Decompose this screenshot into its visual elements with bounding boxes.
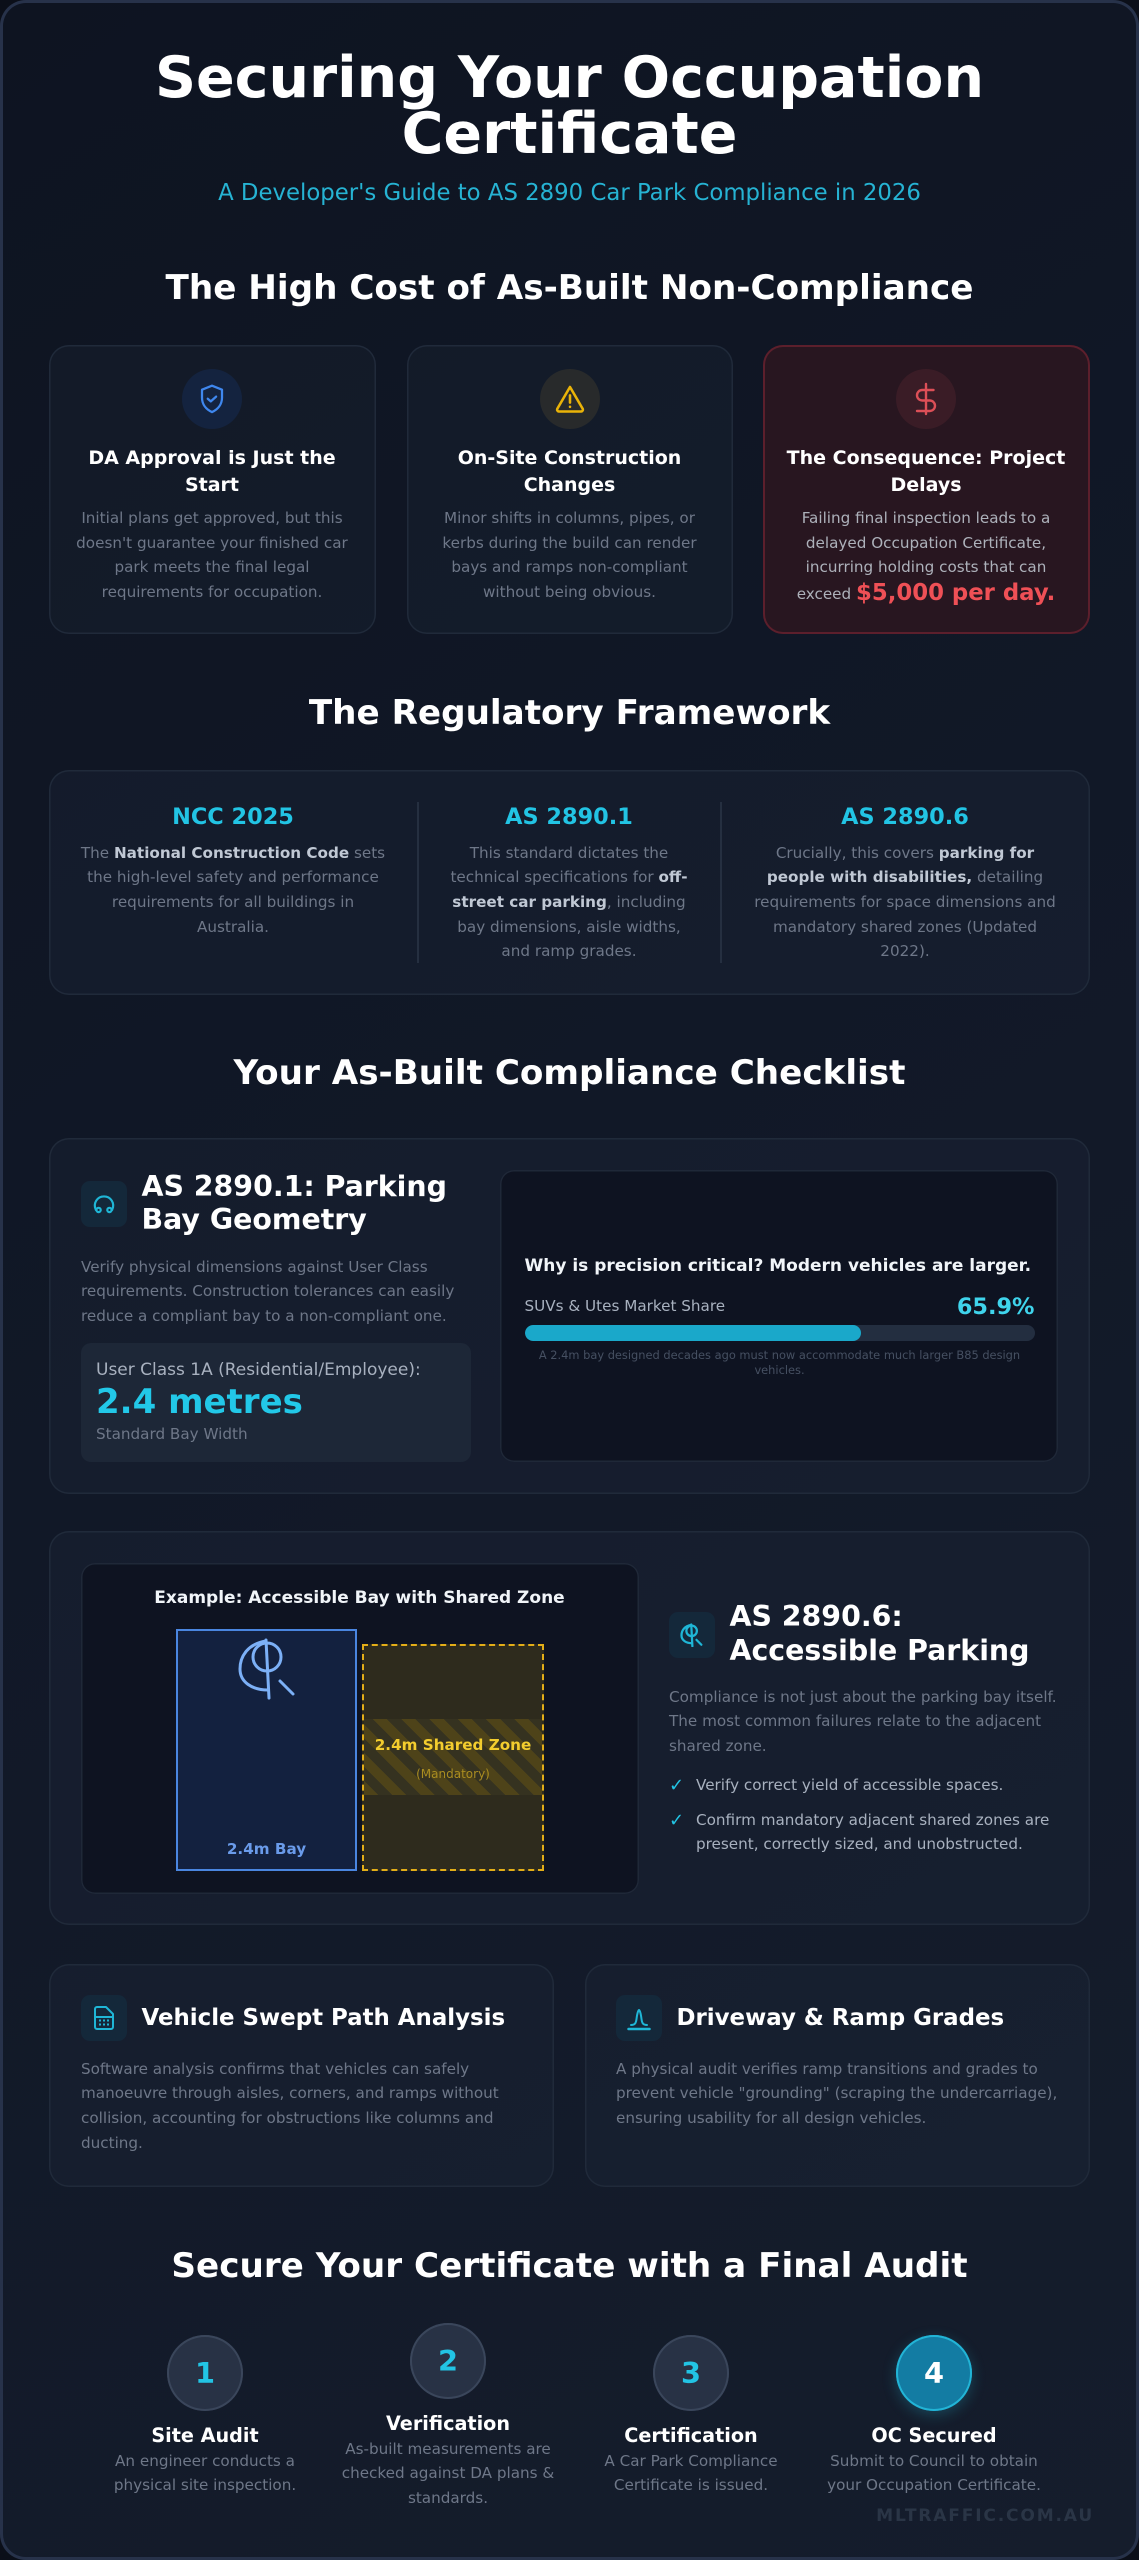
step text: A Car Park Compliance <box>604 2452 778 2470</box>
icon: dollar <box>896 369 956 429</box>
section title <box>142 1170 447 1236</box>
icon: shield <box>182 369 242 429</box>
bar value: 65.9% <box>957 1294 1034 1320</box>
step number <box>167 2335 243 2411</box>
panel: consequence card <box>762 345 1090 634</box>
watermark: MLTRAFFIC.COM.AU <box>876 2506 1094 2526</box>
section text: Verify physical dimensions against User Class <box>81 1258 428 1276</box>
card text: delayed Occupation Certificate, <box>806 534 1046 552</box>
step text: Submit to Council to obtain <box>830 2452 1038 2470</box>
step 3 <box>604 2335 778 2494</box>
step text: checked against DA plans & <box>342 2464 554 2482</box>
chart title: Why is precision critical? Modern vehicles are larger. <box>524 1256 1031 1276</box>
card text <box>76 509 348 601</box>
column text: street car parking, including <box>452 893 686 911</box>
zone note: (Mandatory) <box>416 1767 490 1781</box>
heading: checklist: Your As-Built Compliance Checklist <box>234 1053 905 1093</box>
section text <box>81 1258 454 1325</box>
diagram title: Example: Accessible Bay with Shared Zone <box>154 1588 565 1608</box>
step 1 <box>114 2335 296 2494</box>
check item 2: present, correctly sized, and unobstructed. <box>696 1835 1023 1853</box>
stat note: Standard Bay Width <box>96 1425 248 1443</box>
step number: 1 <box>195 2356 215 2390</box>
zone label: 2.4m Shared Zone <box>375 1736 531 1754</box>
column title: AS 2890.6 <box>841 804 969 830</box>
column text: This standard dictates the <box>470 844 668 862</box>
bar label: SUVs & Utes Market Share <box>524 1296 725 1314</box>
stat label: User Class 1A (Residential/Employee): <box>96 1360 421 1380</box>
column text <box>450 844 688 960</box>
step text <box>114 2452 296 2494</box>
title <box>155 44 984 167</box>
column title: AS 2890.1 <box>505 804 633 830</box>
step text <box>827 2452 1041 2494</box>
section title: Bay Geometry <box>142 1203 367 1236</box>
column text <box>80 844 385 936</box>
column text: mandatory shared zones (Updated <box>773 918 1037 936</box>
column text: and ramp grades. <box>501 942 637 960</box>
step text: As-built measurements are <box>345 2440 551 2458</box>
chart box: market share <box>500 1170 1058 1462</box>
step number: 3 <box>681 2356 701 2390</box>
section text: reduce a compliant bay to a non-compliant one. <box>81 1307 447 1325</box>
icon: warning triangle <box>540 369 600 429</box>
step text: Certificate is issued. <box>614 2476 768 2494</box>
panel: ramp grades <box>585 1964 1090 2186</box>
column text: Crucially, this covers parking for <box>776 844 1034 862</box>
card text: bays and ramps non-compliant <box>451 558 688 576</box>
step number: 4 <box>924 2356 944 2390</box>
check item 2 <box>669 1810 1049 1853</box>
card title <box>786 447 1065 496</box>
card text: kerbs during the build can render <box>442 534 697 552</box>
section title: AS 2890.6: <box>730 1600 903 1633</box>
column: AS 2890.1 <box>450 804 688 960</box>
section text <box>81 2060 499 2152</box>
stat box: bay width <box>81 1343 471 1462</box>
check item 2: Confirm mandatory adjacent shared zones are <box>696 1810 1049 1828</box>
section title: AS 2890.1: Parking <box>142 1170 447 1202</box>
card title <box>458 447 681 496</box>
step text <box>342 2440 554 2507</box>
column text: the high-level safety and performance <box>87 868 379 886</box>
step text <box>604 2452 778 2494</box>
card title: Delays <box>890 474 962 496</box>
section text <box>616 2060 1057 2127</box>
card title: The Consequence: Project <box>787 447 1065 469</box>
section title <box>730 1600 1029 1667</box>
diagram box: accessible bay <box>81 1562 638 1894</box>
checklist <box>669 1775 1049 1853</box>
heading: high cost: The High Cost of As-Built Non-Compliance <box>166 268 973 308</box>
bay label: 2.4m Bay <box>227 1840 306 1858</box>
column text: people with disabilities, detailing <box>767 868 1043 886</box>
icon: accessible <box>669 1612 715 1658</box>
card text: without being obvious. <box>483 583 656 601</box>
section text: requirements. Construction tolerances can easily <box>81 1282 454 1300</box>
title: Certificate <box>402 101 737 167</box>
title: Securing Your Occupation <box>155 44 984 110</box>
section text <box>668 1688 1057 1755</box>
card text: Initial plans get approved, but this <box>81 509 343 527</box>
section text: ensuring usability for all design vehicles. <box>616 2109 926 2127</box>
section text: shared zone. <box>669 1737 767 1755</box>
step label: Verification <box>386 2412 510 2435</box>
card title: On-Site Construction <box>458 447 681 469</box>
panel: parking bay geometry <box>49 1138 1090 1494</box>
stat value: 2.4 metres <box>96 1382 303 1422</box>
bar track <box>524 1324 1034 1340</box>
column text: requirements for space dimensions and <box>754 893 1056 911</box>
panel: swept path <box>49 1964 554 2186</box>
column: AS 2890.6 <box>754 804 1056 960</box>
step label: OC Secured <box>871 2424 997 2447</box>
column text <box>754 844 1056 960</box>
heading: final audit: Secure Your Certificate with a Final Audit <box>171 2246 968 2286</box>
bar fill <box>524 1324 860 1340</box>
step text: An engineer conducts a <box>115 2452 295 2470</box>
section text: ducting. <box>81 2134 143 2152</box>
column text: The National Construction Code sets <box>81 844 385 862</box>
icon: car <box>81 1181 127 1227</box>
step number <box>653 2335 729 2411</box>
card title: Changes <box>524 474 615 496</box>
section text: collision, accounting for obstructions like columns and <box>81 2109 493 2127</box>
column: NCC 2025 <box>80 804 385 936</box>
hatch band <box>364 1719 542 1795</box>
bar note <box>539 1348 1020 1376</box>
step 2 <box>342 2323 554 2507</box>
panel: accessible parking <box>49 1531 1090 1924</box>
bar note: A 2.4m bay designed decades ago must now accommodate much larger B85 design <box>539 1348 1020 1362</box>
card text: exceed $5,000 per day. <box>797 580 1055 606</box>
step number <box>896 2335 972 2411</box>
section title: Vehicle Swept Path Analysis <box>142 2005 505 2031</box>
card text: Minor shifts in columns, pipes, or <box>444 509 695 527</box>
section title: Driveway & Ramp Grades <box>676 2005 1004 2031</box>
section text: manoeuvre through aisles, corners, and ramps without <box>81 2084 499 2102</box>
step number: 2 <box>438 2344 458 2378</box>
column text: Australia. <box>197 918 269 936</box>
icon: wheelchair <box>238 1638 295 1700</box>
card text: requirements for occupation. <box>102 583 322 601</box>
accessible bay <box>176 1629 357 1871</box>
column text: requirements for all buildings in <box>112 893 354 911</box>
card title: DA Approval is Just the <box>88 447 336 469</box>
step text: standards. <box>408 2489 488 2507</box>
card text: Failing final inspection leads to a <box>802 509 1050 527</box>
section title: Accessible Parking <box>730 1634 1029 1667</box>
check item 1: Verify correct yield of accessible spaces. <box>696 1776 1003 1794</box>
section text: Compliance is not just about the parking bay itself. <box>669 1688 1057 1706</box>
column title: NCC 2025 <box>172 804 294 830</box>
check item 2: ✓ <box>669 1810 684 1830</box>
bar note: vehicles. <box>754 1362 805 1376</box>
check item 1: ✓ <box>669 1775 684 1796</box>
section text: prevent vehicle "grounding" (scraping the undercarriage), <box>616 2084 1057 2102</box>
step label: Certification <box>624 2424 758 2447</box>
icon: calculator document <box>81 1995 127 2041</box>
step 4 <box>827 2334 1041 2494</box>
section text: The most common failures relate to the adjacent <box>669 1712 1041 1730</box>
card text: doesn't guarantee your finished car <box>76 534 348 552</box>
card text <box>797 509 1055 606</box>
card text: incurring holding costs that can <box>806 558 1046 576</box>
panel: regulatory framework <box>49 770 1090 994</box>
card title <box>88 447 336 496</box>
column text: bay dimensions, aisle widths, <box>457 918 681 936</box>
section text: Software analysis confirms that vehicles can safely <box>81 2060 469 2078</box>
heading: regulatory framework: The Regulatory Framework <box>309 693 830 733</box>
column text: 2022). <box>880 942 930 960</box>
card text <box>442 509 697 601</box>
subtitle: A Developer's Guide to AS 2890 Car Park Compliance in 2026 <box>218 180 921 206</box>
shared zone <box>362 1644 544 1871</box>
panel: on-site changes card <box>406 345 732 634</box>
step text: your Occupation Certificate. <box>827 2476 1041 2494</box>
card title: Start <box>185 474 239 496</box>
step number <box>410 2323 486 2399</box>
section text: A physical audit verifies ramp transitions and grades to <box>616 2060 1038 2078</box>
icon: grade curve <box>616 1995 662 2041</box>
step text: physical site inspection. <box>114 2476 296 2494</box>
column text: technical specifications for off- <box>450 868 688 886</box>
step label: Site Audit <box>151 2424 259 2447</box>
panel: DA approval card <box>49 345 376 634</box>
card text: park meets the final legal <box>114 558 310 576</box>
